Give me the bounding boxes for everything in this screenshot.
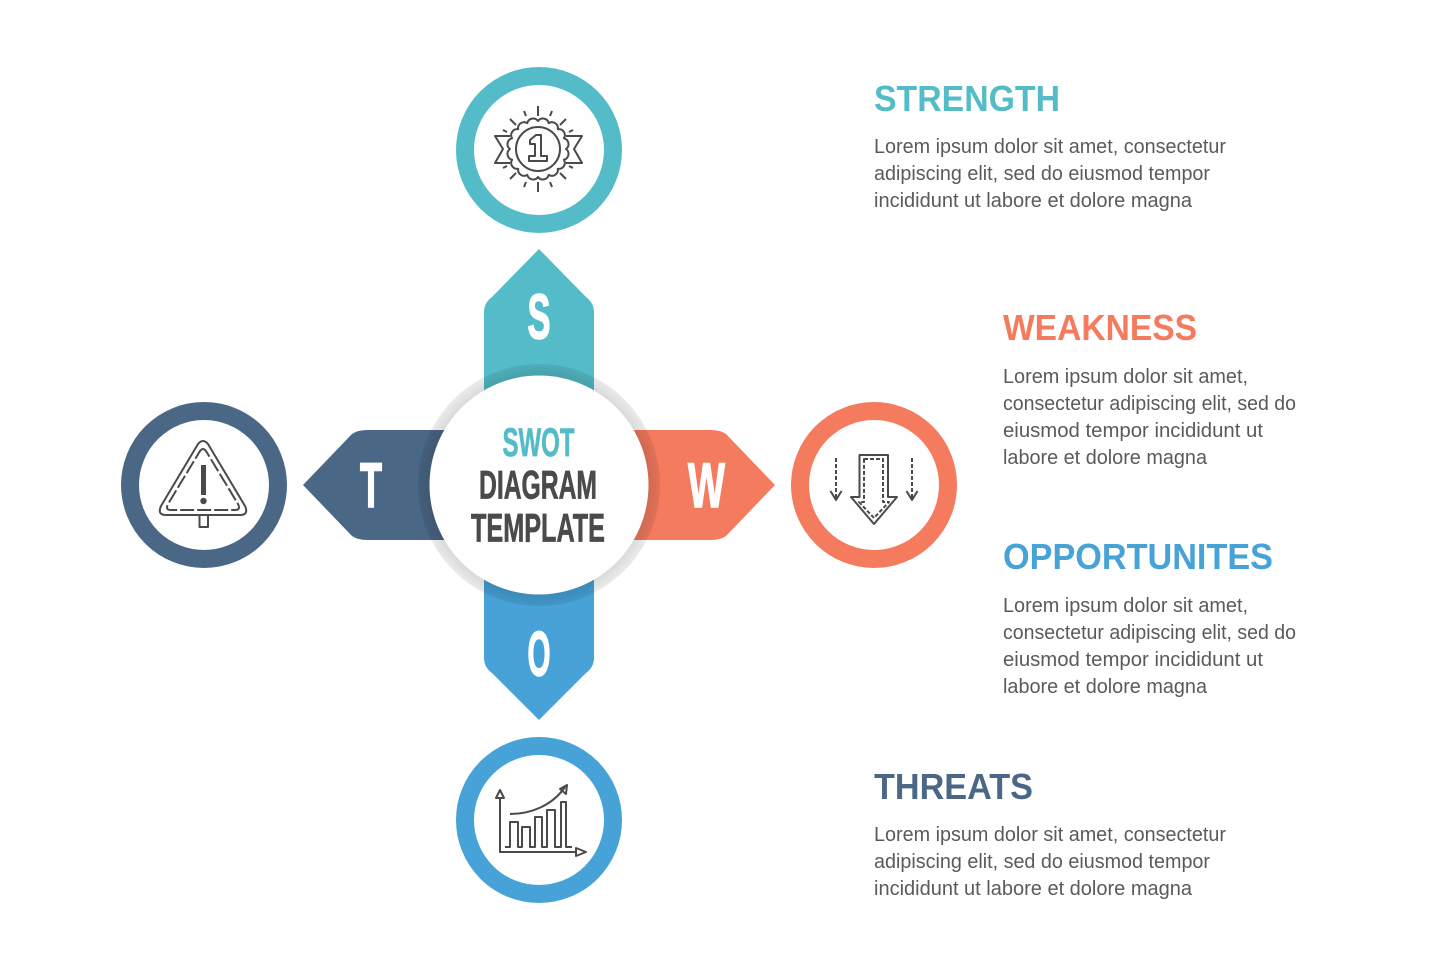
node: strength [465,76,613,224]
arrow: O [484,485,594,720]
letter S: S [528,282,550,352]
body: weakness: consectetur adipiscing elit, sed do [1003,393,1296,415]
body: threats: adipiscing elit, sed do eiusmod tempor [874,851,1210,873]
body: weakness: labore et dolore magna [1003,447,1208,469]
body: threats [874,824,1226,900]
body: weakness [1003,366,1296,469]
center title: DIAGRAM [479,464,597,508]
body: weakness: eiusmod tempor incididunt ut [1003,420,1263,442]
center title: SWOT [502,421,574,465]
text block: opportunities: OPPORTUNITES [1003,536,1273,577]
body: opportunities: eiusmod tempor incididunt ut [1003,649,1263,671]
body: opportunities: labore et dolore magna [1003,676,1208,698]
text block: weakness [1003,307,1296,469]
arrow: W [539,430,775,540]
node: weakness [800,411,948,559]
text block: strength [874,78,1226,212]
body: strength: incididunt ut labore et dolore magna [874,190,1193,212]
center title: TEMPLATE [471,506,605,550]
arrow: O: O [528,620,550,690]
body: weakness: Lorem ipsum dolor sit amet, [1003,366,1248,388]
node: threats [130,411,278,559]
body: opportunities: Lorem ipsum dolor sit amet, [1003,595,1248,617]
center title [471,421,605,550]
icon: growth chart [496,785,586,856]
letter T: T [360,451,382,521]
icon: warning sign [160,441,246,527]
body: strength: adipiscing elit, sed do eiusmod tempor [874,163,1210,185]
arrow: S [484,249,594,485]
node: opportunities [465,746,613,894]
body: strength [874,136,1226,212]
arrow: T [303,430,539,540]
icon: medal [495,106,582,192]
body: opportunities [1003,595,1296,698]
body: opportunities: consectetur adipiscing elit, sed do [1003,622,1296,644]
text block: strength: STRENGTH [874,78,1060,119]
text block: weakness: WEAKNESS [1003,307,1197,348]
body: strength: Lorem ipsum dolor sit amet, consectetur [874,136,1226,158]
center circle [418,364,660,606]
body: threats: Lorem ipsum dolor sit amet, consectetur [874,824,1226,846]
text block: opportunities [1003,536,1296,698]
letter W: W [688,451,725,521]
text block: threats: THREATS [874,766,1033,807]
icon: down arrows [830,455,918,524]
body: threats: incididunt ut labore et dolore magna [874,878,1193,900]
text block: threats [874,766,1226,900]
